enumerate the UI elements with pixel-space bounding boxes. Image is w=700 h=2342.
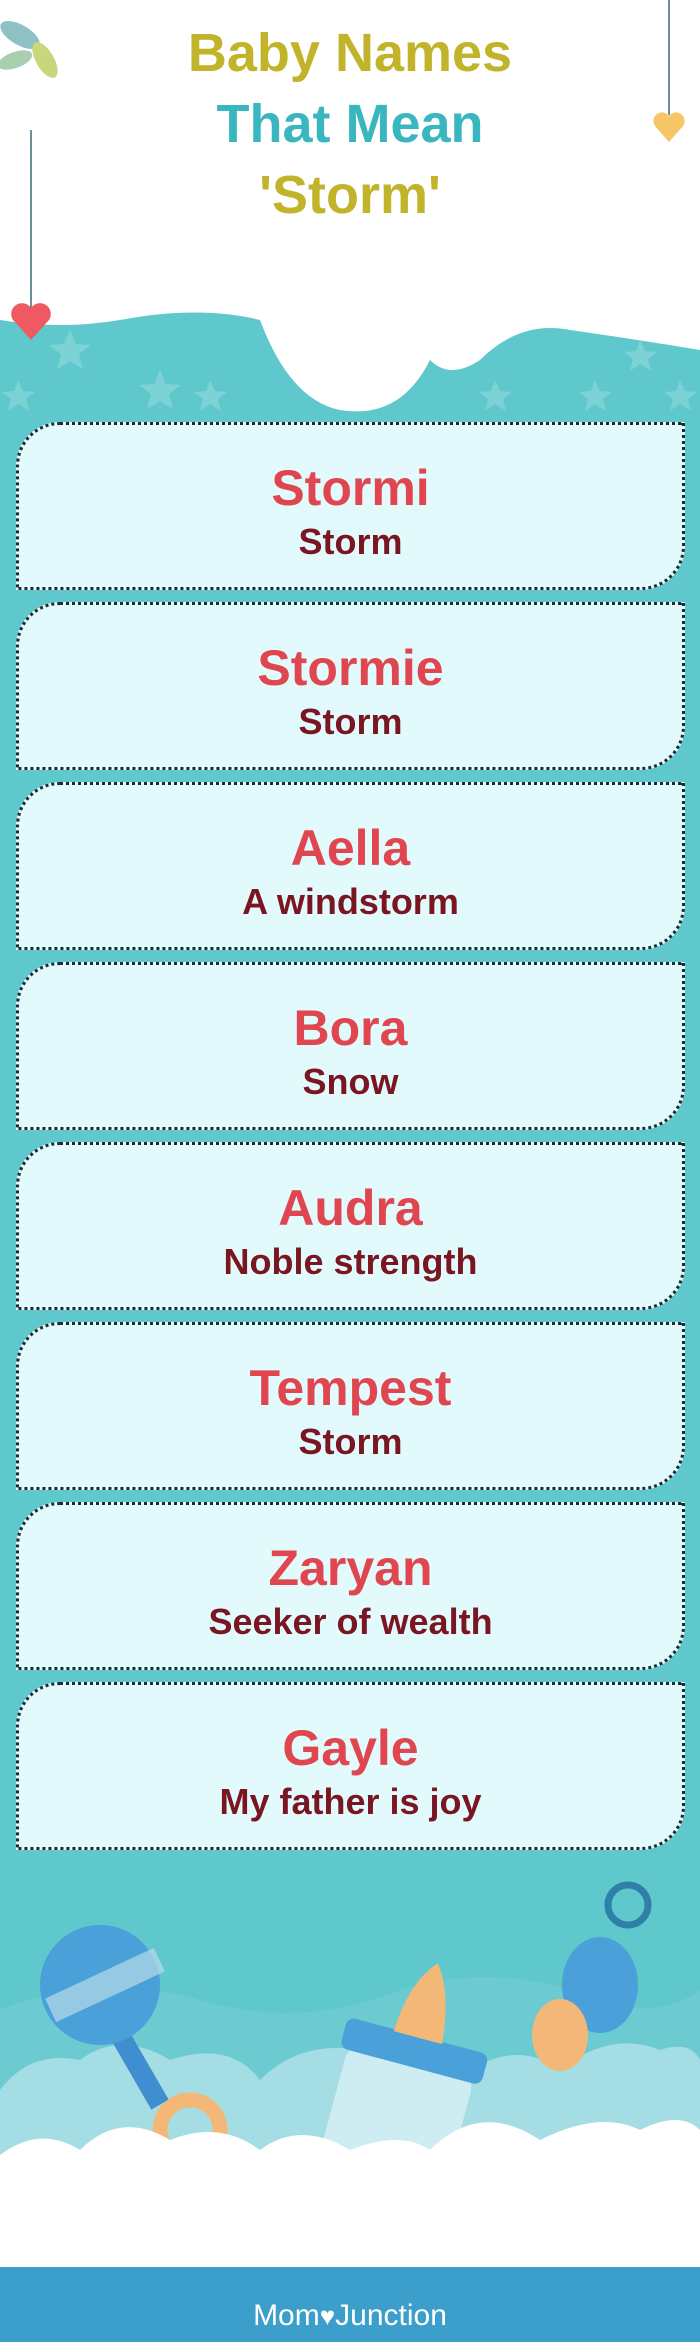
card: Zaryan: Seeker of wealth xyxy=(208,1601,493,1642)
card: Stormi: Storm xyxy=(298,521,402,562)
card: Tempest xyxy=(16,1322,685,1490)
title: Baby Names xyxy=(188,23,512,83)
card: Aella: A windstorm xyxy=(242,881,459,922)
card: Tempest: Tempest xyxy=(250,1360,451,1416)
pacifier xyxy=(532,1885,648,2071)
title: 'Storm' xyxy=(259,165,441,225)
card: Zaryan xyxy=(16,1502,685,1670)
card: Audra: Noble strength xyxy=(223,1241,478,1282)
card: Bora: Bora xyxy=(294,1000,407,1056)
title xyxy=(188,23,512,225)
title: That Mean xyxy=(216,94,484,154)
header cloud xyxy=(0,0,700,412)
decoration: hanging hearts xyxy=(11,0,685,340)
footer logo bar xyxy=(0,2267,700,2342)
footer logo bar: Mom♥Junction xyxy=(253,2299,447,2332)
decoration: leaves xyxy=(0,21,58,78)
card: Stormie: Storm xyxy=(298,701,402,742)
card: Aella: Aella xyxy=(291,820,410,876)
card: Gayle xyxy=(16,1682,685,1850)
card: Bora xyxy=(16,962,685,1130)
card: Aella xyxy=(16,782,685,950)
card: Tempest: Storm xyxy=(298,1421,402,1462)
card: Stormi: Stormi xyxy=(271,460,430,516)
card: Stormi xyxy=(16,422,685,590)
card: Audra: Audra xyxy=(278,1180,423,1236)
bottle xyxy=(281,1944,508,2306)
card: Gayle: My father is joy xyxy=(219,1781,482,1822)
rattle xyxy=(40,1925,220,2160)
card: Stormie: Stormie xyxy=(257,640,444,696)
card: Audra xyxy=(16,1142,685,1310)
bottom illustration xyxy=(0,1882,700,2267)
card: Bora: Snow xyxy=(302,1061,398,1102)
card: Gayle: Gayle xyxy=(282,1720,419,1776)
card: Stormie xyxy=(16,602,685,770)
card: Zaryan: Zaryan xyxy=(269,1540,432,1596)
